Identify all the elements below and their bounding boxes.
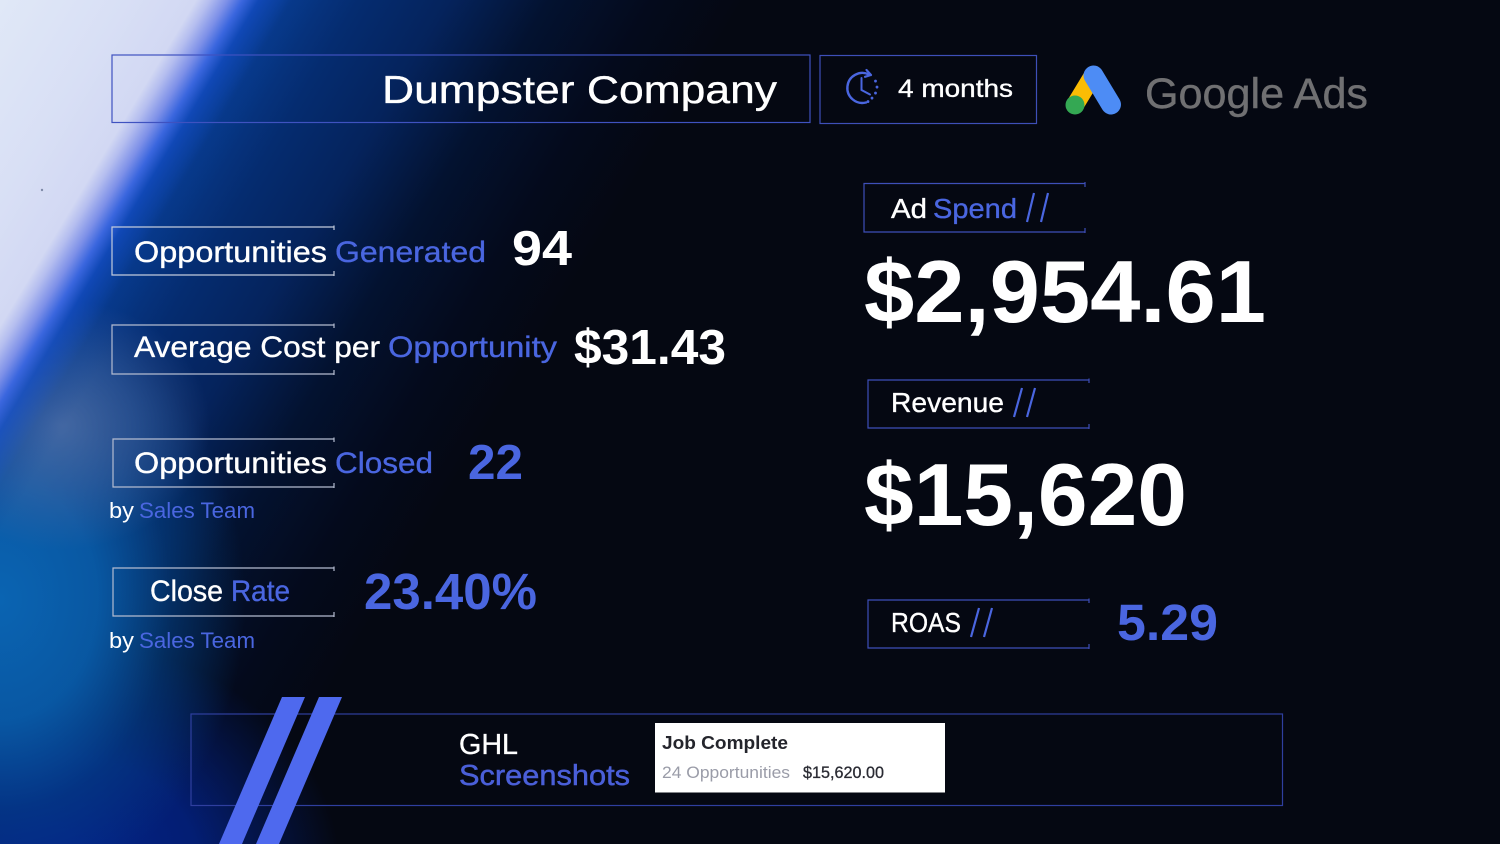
metric: opportunities generated: Generated (335, 236, 486, 269)
GHL screenshots panel: Screenshots (459, 760, 630, 792)
duration box: 4 months (898, 75, 1013, 103)
Google Ads logo: Google Ads (1145, 70, 1368, 118)
logo mark (1066, 76, 1111, 114)
metric: roas: ROAS (891, 607, 961, 638)
title box (112, 55, 810, 122)
metric: opportunities closed: Closed (335, 447, 433, 480)
metric: opportunities generated: Opportunities (134, 236, 327, 269)
metric: average cost per opportunity: Opportunity (388, 331, 557, 364)
screenshot: job complete: $15,620.00 (803, 763, 884, 782)
metric: close rate: Rate (231, 575, 290, 608)
metric: close rate: 23.40% (364, 563, 537, 620)
screenshot: job complete: Job Complete (662, 733, 788, 753)
speck (41, 189, 43, 191)
screenshot: job complete (655, 723, 945, 792)
metric: ad spend: Spend (933, 193, 1017, 224)
metric: average cost per opportunity: Average Cost per (134, 331, 380, 364)
metric: roas: 5.29 (1117, 594, 1218, 651)
metric: revenue: Revenue (891, 387, 1004, 418)
metric: ad spend: $2,954.61 (864, 242, 1266, 341)
metric: opportunities closed: Sales Team (139, 498, 255, 523)
metric: ad spend: Ad (891, 193, 927, 224)
metric: roas (868, 594, 1218, 651)
title box: Dumpster Company (382, 69, 778, 112)
metric: ad spend (864, 182, 1266, 341)
metric: revenue: $15,620 (864, 445, 1187, 544)
metric: close rate: Sales Team (139, 628, 255, 653)
metric: opportunities closed: 22 (468, 436, 523, 490)
icon: double slash (219, 697, 342, 844)
GHL screenshots panel (191, 697, 1282, 844)
duration box (820, 56, 1036, 124)
icon: clock (847, 70, 877, 103)
metric: opportunities generated (112, 222, 572, 276)
metric: opportunities closed: by (109, 498, 134, 523)
metric: opportunities generated: 94 (512, 222, 572, 276)
metric: close rate: Close (150, 575, 223, 608)
GHL screenshots panel: GHL (459, 729, 518, 761)
metric: close rate (109, 563, 537, 653)
screenshot: job complete: 24 Opportunities (662, 763, 790, 782)
metric: opportunities closed: Opportunities (134, 447, 327, 480)
metric: average cost per opportunity: $31.43 (574, 321, 726, 375)
metric: close rate: by (109, 628, 134, 653)
metric: opportunities closed (109, 436, 523, 523)
metric: average cost per opportunity (112, 321, 726, 375)
metric: revenue (864, 378, 1187, 544)
